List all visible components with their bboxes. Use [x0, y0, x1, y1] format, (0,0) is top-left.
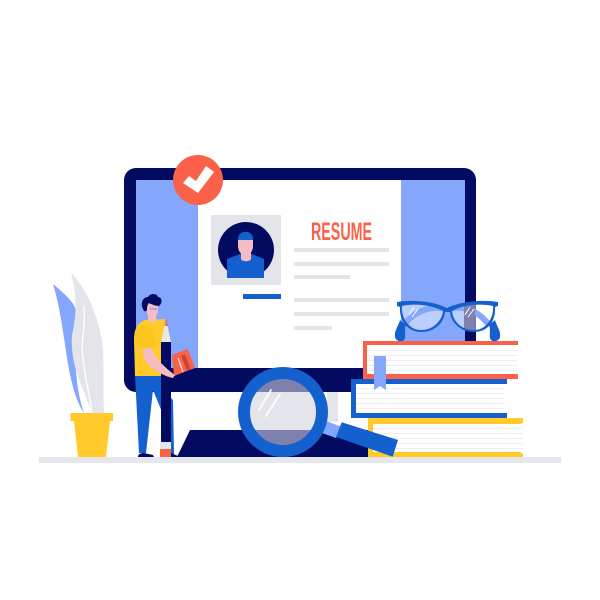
handle: [336, 422, 398, 457]
bookmark: [374, 356, 386, 390]
ground line: [39, 457, 561, 463]
legs: [135, 375, 174, 454]
face: [146, 304, 158, 317]
leaf vein: [82, 305, 92, 413]
name bar: [243, 294, 281, 299]
pencil: [160, 319, 171, 457]
monitor stand base: [177, 430, 368, 457]
monitor screen: [136, 180, 465, 368]
shoes: [138, 453, 154, 457]
lens fill: [402, 304, 490, 330]
frame: [397, 301, 498, 332]
blue book: [351, 379, 507, 418]
check badge: [173, 155, 223, 205]
book stack: [351, 341, 523, 457]
resume page: [198, 180, 401, 368]
temple arms: [395, 320, 406, 341]
ring: [244, 373, 322, 451]
monitor: [124, 168, 476, 457]
text lines: [294, 248, 389, 330]
pot: [74, 421, 110, 457]
red book: [363, 341, 518, 379]
handle connector: [322, 421, 342, 438]
sleeve: [134, 325, 155, 349]
profile photo: [211, 215, 281, 285]
grey leaf: [71, 273, 104, 413]
glasses on face: [150, 308, 157, 310]
resume heading: RESUME: [311, 218, 372, 246]
arm: [142, 348, 175, 378]
shadow strip: [327, 392, 338, 422]
person with pencil: [134, 294, 195, 457]
plant: [53, 273, 113, 457]
neck: [148, 312, 156, 323]
lens contents: [250, 379, 316, 445]
monitor frame: [124, 168, 476, 392]
blue leaf: [53, 284, 84, 413]
magnifying glass: [240, 370, 398, 457]
red book in hand: [172, 349, 195, 376]
hair: [142, 294, 162, 311]
infographic scene: [39, 155, 561, 463]
glasses: [395, 300, 500, 341]
yellow book: [368, 418, 523, 457]
torso: [134, 319, 165, 376]
